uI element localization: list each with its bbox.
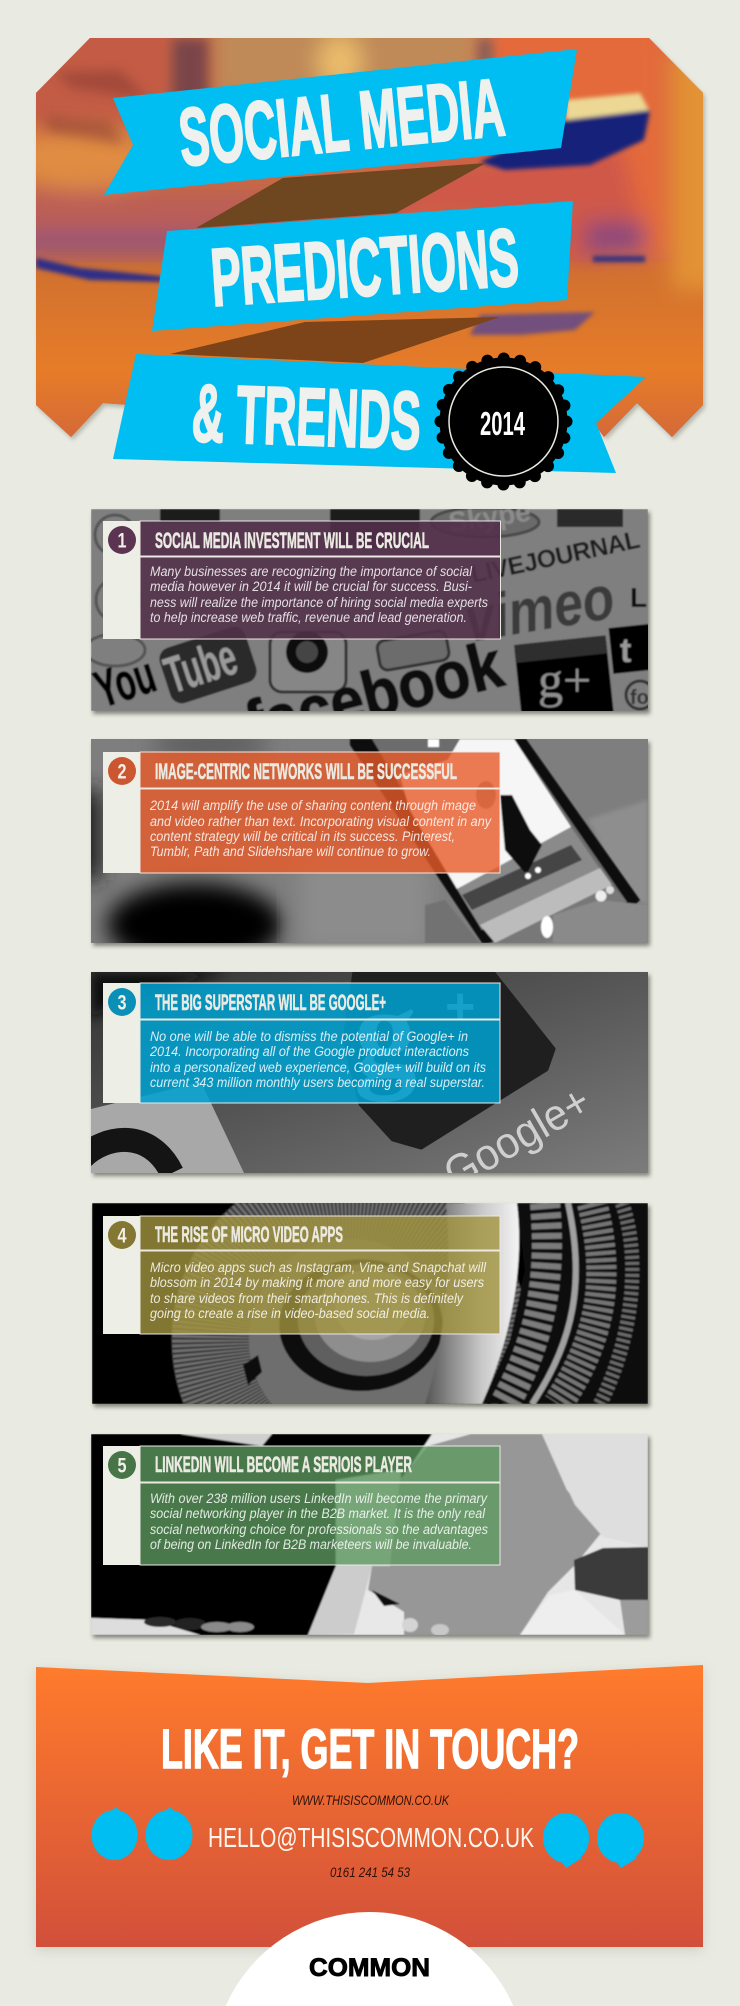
panel 3: Google+	[90, 972, 653, 1179]
body text	[149, 798, 492, 859]
body band	[140, 1251, 500, 1334]
website: WWW.THISISCOMMON.CO.UK	[292, 1792, 450, 1808]
hero photo panel	[36, 38, 707, 441]
body text: Many businesses are recognizing the importance of social	[150, 564, 473, 579]
photo: social logos: vimeo	[460, 563, 619, 656]
heading text: THE BIG SUPERSTAR WILL BE GOOGLE+	[155, 990, 386, 1015]
photo: social logos: Skype	[447, 496, 533, 538]
number 2	[108, 757, 136, 785]
body band	[140, 789, 500, 873]
heading text: SOCIAL MEDIA INVESTMENT WILL BE CRUCIAL	[155, 528, 429, 553]
heading band	[140, 752, 500, 788]
icon: speech bubbles right	[543, 1813, 644, 1868]
photo: social logos: fo	[630, 687, 649, 709]
number 2: 2	[118, 760, 126, 784]
body text: blossom in 2014 by making it more and more easy for users	[150, 1275, 484, 1290]
badge: 2014	[440, 358, 568, 486]
badge: 2014: 2014	[480, 405, 525, 442]
callout: number column	[103, 983, 140, 1103]
ribbon: Predictions	[152, 201, 573, 331]
photo: camera lens	[92, 1203, 648, 1404]
body text: With over 238 million users LinkedIn will become the primary	[150, 1491, 488, 1506]
body text: social networking player in the B2B market. It is the only real	[150, 1506, 486, 1521]
callout: number column	[103, 1216, 140, 1334]
body text: to share videos from their smartphones. This is definitely	[150, 1291, 464, 1306]
body text: Tumblr, Path and Slidehshare will continue to grow.	[150, 844, 431, 859]
photo: social logos: L	[630, 582, 647, 613]
ribbon: & Trends: & TRENDS	[190, 368, 422, 467]
number 5: 5	[118, 1454, 127, 1478]
footer panel	[36, 1665, 703, 1950]
photo: social logos: g+	[538, 652, 591, 708]
body text: Micro video apps such as Instagram, Vine and Snapchat will	[150, 1260, 487, 1275]
callout: number column	[103, 1446, 140, 1565]
photo: social logos: You	[88, 646, 163, 719]
number 5	[108, 1451, 136, 1479]
number 3	[108, 988, 136, 1016]
body text	[150, 1260, 487, 1321]
photo: Google+ icon: +	[445, 978, 475, 1036]
body text: content strategy will be critical in its success. Pinterest,	[150, 829, 455, 844]
body text	[150, 1491, 488, 1552]
photo: social logos: Tube	[158, 628, 244, 705]
heading text: IMAGE-CENTRIC NETWORKS WILL BE SUCCESSFUL	[155, 759, 457, 784]
body text: into a personalized web experience, Google+ will build on its	[150, 1060, 486, 1075]
heading band	[140, 983, 500, 1019]
heading band	[140, 1446, 500, 1482]
number 4: 4	[118, 1224, 127, 1248]
photo: social logos: facebook	[237, 626, 510, 762]
photo: Google+ icon	[91, 972, 648, 1173]
body text: 2014. Incorporating all of the Google product interactions	[149, 1044, 469, 1059]
panel 4: micro video apps	[91, 1203, 653, 1410]
body band	[140, 1483, 500, 1565]
photo: handshake	[91, 1434, 648, 1636]
panel 2: image-centric networks	[90, 739, 653, 949]
logo circle: Common	[226, 1912, 513, 2006]
body text: of being on LinkedIn for B2B marketeers will be invaluable.	[150, 1537, 472, 1552]
number 4	[108, 1221, 136, 1249]
body text: social networking choice for professionals so the advantages	[150, 1522, 488, 1537]
heading text: LINKEDIN WILL BECOME A SERIOIS PLAYER	[155, 1452, 412, 1477]
icon: speech bubbles left	[92, 1807, 192, 1860]
heading band	[140, 521, 500, 556]
body text: current 343 million monthly users becoming a real superstar.	[150, 1075, 485, 1090]
body text	[149, 1029, 486, 1090]
panel 1: social media investment	[90, 509, 653, 717]
photo: social logos	[91, 509, 648, 711]
panel 5: LinkedIn	[91, 1434, 650, 1638]
body text: ness will realize the importance of hiring social media experts	[150, 595, 488, 610]
number 3: 3	[118, 992, 126, 1014]
logo circle: Common: COMMON	[309, 1954, 430, 1982]
ribbon: & Trends	[113, 354, 646, 473]
body text: to help increase web traffic, revenue and lead generation.	[150, 610, 467, 625]
photo: social logos: LIVEJOURNAL	[468, 526, 642, 589]
body text: No one will be able to dismiss the potential of Google+ in	[150, 1029, 468, 1044]
body text	[150, 564, 488, 625]
ribbon: Social Media	[104, 49, 577, 195]
callout: number column	[103, 521, 140, 639]
heading text: THE RISE OF MICRO VIDEO APPS	[155, 1222, 343, 1247]
heading band	[140, 1216, 500, 1250]
number 1	[108, 526, 136, 554]
body text: media however in 2014 it will be crucial for success. Busi-	[150, 579, 472, 594]
phone number: 0161 241 54 53	[330, 1864, 410, 1880]
photo: Google+ icon: Google+	[436, 1076, 599, 1199]
body band	[140, 557, 500, 639]
callout: number column	[103, 752, 140, 873]
body text: and video rather than text. Incorporating visual content in any	[150, 814, 492, 829]
body band	[140, 1020, 500, 1103]
ribbon connecting shadow	[196, 163, 486, 228]
number 1: 1	[118, 530, 127, 552]
body text: 2014 will amplify the use of sharing content through image	[149, 798, 476, 813]
photo: Google+ icon: g	[354, 963, 417, 1102]
email: HELLO@THISISCOMMON.CO.UK	[208, 1822, 534, 1853]
body text: going to create a rise in video-based social media.	[150, 1306, 430, 1321]
photo: social logos: t	[620, 632, 631, 670]
photo: phone in hand	[91, 739, 648, 943]
